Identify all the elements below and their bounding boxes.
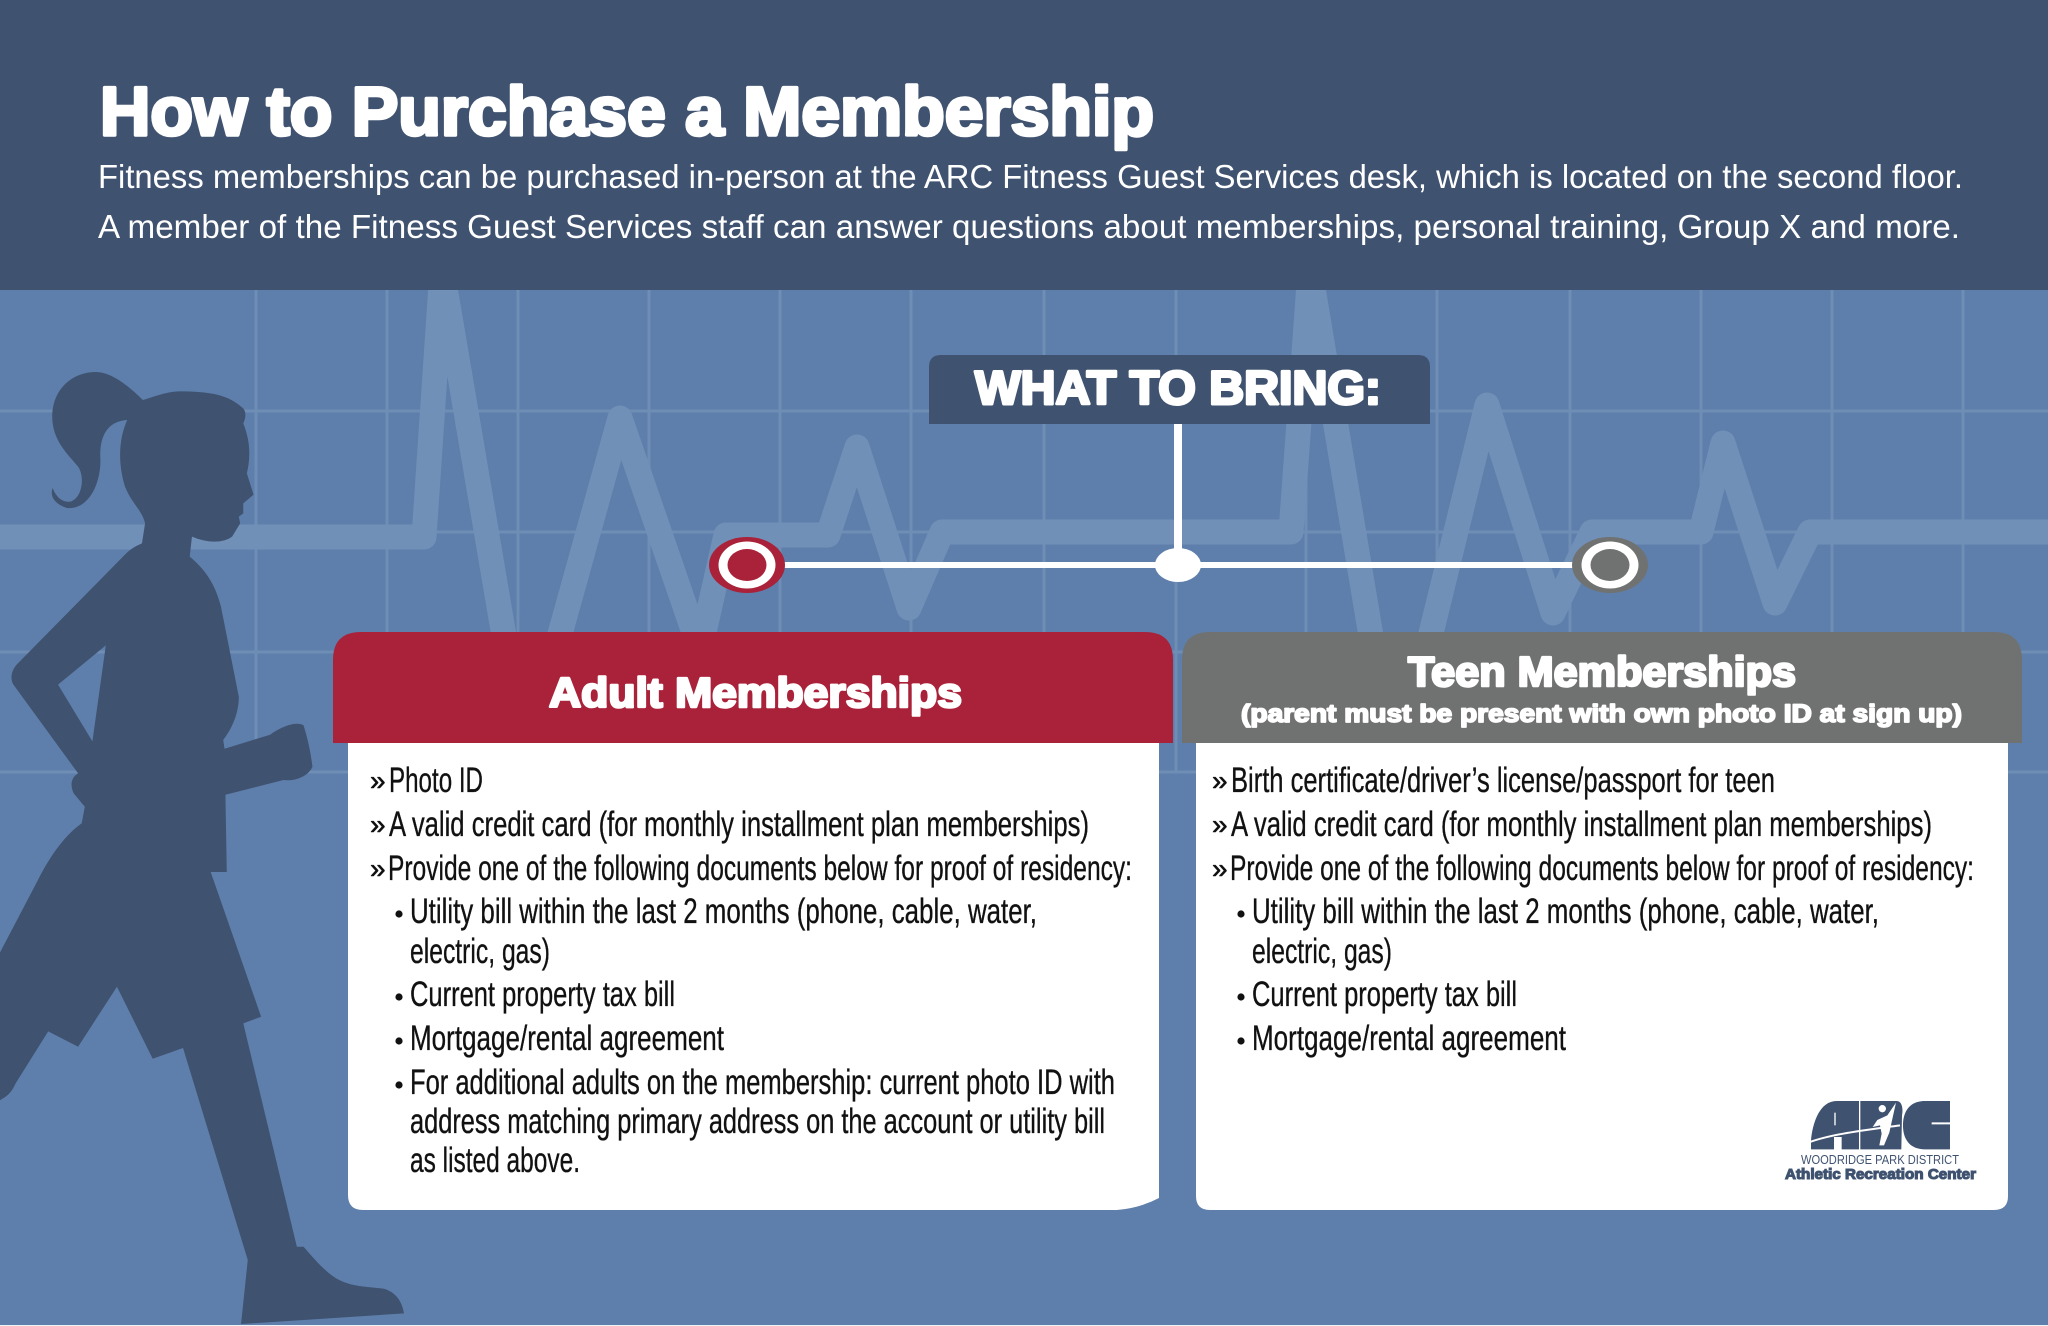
adult requirements list: A valid credit card (for monthly installment plan memberships) bbox=[389, 805, 1089, 844]
runner silhouette bbox=[0, 372, 404, 1324]
teen requirements list: Mortgage/rental agreement bbox=[1252, 1019, 1566, 1058]
teen requirements list: » bbox=[1212, 809, 1228, 840]
teen heading: Teen Memberships bbox=[1408, 648, 1796, 695]
intro text: A member of the Fitness Guest Services staff can answer questions about memberships, personal training, Group X and more. bbox=[98, 209, 1960, 246]
adult requirements list bbox=[370, 761, 1132, 1180]
teen requirements list: Current property tax bill bbox=[1252, 975, 1517, 1014]
adult requirements list: » bbox=[370, 853, 386, 884]
intro text: Fitness memberships can be purchased in-person at the ARC Fitness Guest Services desk, which is located on the second floor. bbox=[98, 159, 1963, 196]
intro text bbox=[98, 159, 1963, 246]
title: How to Purchase a Membership bbox=[100, 73, 1154, 150]
adult requirements list: electric, gas) bbox=[410, 932, 550, 971]
teen card body bbox=[1196, 743, 2008, 1210]
teen requirements list bbox=[1212, 761, 1974, 1058]
adult card body bbox=[348, 743, 1159, 1210]
adult requirements list: » bbox=[370, 809, 386, 840]
node: teen bbox=[1572, 537, 1648, 593]
teen requirements list: » bbox=[1212, 853, 1228, 884]
what to bring label: WHAT TO BRING: bbox=[975, 361, 1381, 414]
adult requirements list: Provide one of the following documents below for proof of residency: bbox=[388, 849, 1132, 888]
adult requirements list: address matching primary address on the account or utility bill bbox=[410, 1102, 1105, 1141]
adult heading: Adult Memberships bbox=[549, 669, 962, 716]
ARC logo bbox=[1785, 1101, 1976, 1183]
header band bbox=[0, 0, 2048, 290]
logo text: Athletic Recreation Center bbox=[1785, 1167, 1976, 1183]
heartbeat line background bbox=[0, 270, 2048, 780]
what to bring label bbox=[929, 355, 1430, 424]
adult requirements list: Photo ID bbox=[389, 761, 483, 800]
teen requirements list: Birth certificate/driver’s license/passport for teen bbox=[1231, 761, 1775, 800]
adult requirements list: For additional adults on the membership: current photo ID with bbox=[410, 1063, 1115, 1102]
logo text bbox=[1785, 1152, 1976, 1183]
node: center bbox=[1155, 548, 1201, 582]
teen requirements list: electric, gas) bbox=[1252, 932, 1392, 971]
teen heading bbox=[1182, 632, 2022, 743]
adult requirements list: Utility bill within the last 2 months (phone, cable, water, bbox=[410, 892, 1037, 931]
panel: teen memberships bbox=[1182, 632, 2022, 1210]
adult requirements list: Mortgage/rental agreement bbox=[410, 1019, 724, 1058]
node: adult bbox=[709, 537, 785, 593]
adult requirements list: Current property tax bill bbox=[410, 975, 675, 1014]
teen heading: (parent must be present with own photo ID at sign up) bbox=[1241, 700, 1962, 728]
panel: adult memberships bbox=[333, 632, 1173, 1210]
adult requirements list: » bbox=[370, 765, 386, 796]
logo text: WOODRIDGE PARK DISTRICT bbox=[1801, 1152, 1959, 1167]
teen requirements list: » bbox=[1212, 765, 1228, 796]
connector lines bbox=[780, 424, 1575, 568]
logo mark bbox=[1810, 1101, 1950, 1149]
adult requirements list: as listed above. bbox=[410, 1141, 580, 1180]
adult heading bbox=[333, 632, 1173, 743]
